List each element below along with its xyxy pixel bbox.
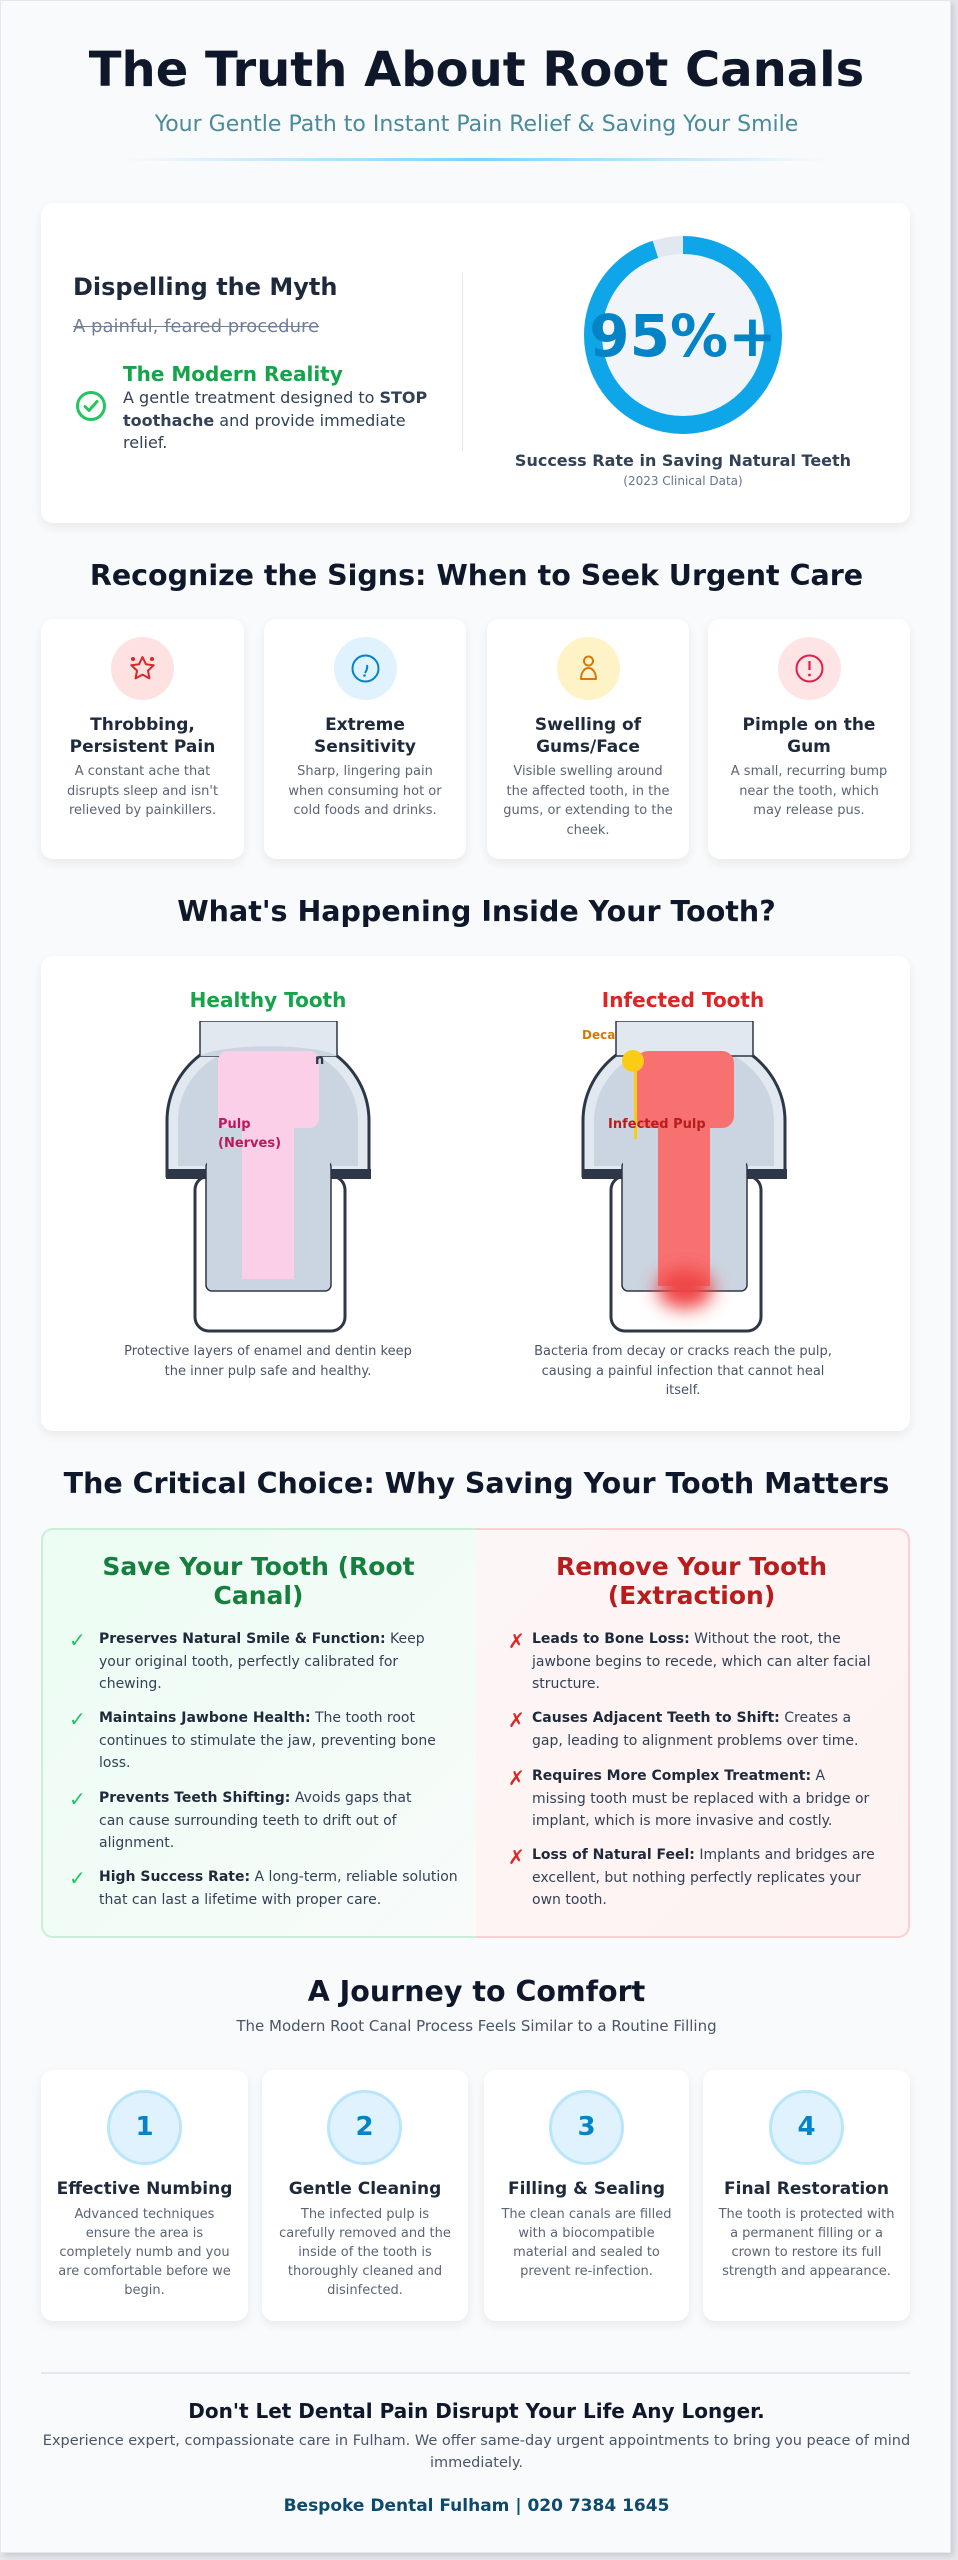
subtitle: Your Gentle Path to Instant Pain Relief & Saving Your Smile — [155, 112, 798, 137]
heading: inside your tooth: What's Happening Inside Your Tooth? — [177, 895, 776, 928]
caption: infected: Bacteria from decay or cracks reach the pulp, causing a painful infection that cannot heal itself. — [534, 1344, 832, 1398]
text — [503, 715, 673, 838]
text: The tooth is protected with a permanent filling or a crown to restore its full strength and appearance. — [719, 2207, 894, 2279]
list: Loss of Natural Feel: Implants and bridges are excellent, but nothing perfectly replicates your own tooth. — [532, 1847, 875, 1908]
text: The infected pulp is carefully removed and the inside of the tooth is thoroughly cleaned and disinfected. — [279, 2207, 451, 2298]
panel: tooth comparison — [41, 956, 910, 1431]
text: Final Restoration — [724, 2179, 889, 2199]
icon: pain star — [111, 637, 174, 700]
panel: step 4 — [703, 2070, 910, 2321]
reality text: The Modern Reality — [123, 362, 343, 386]
icon: number 1 — [107, 2090, 182, 2165]
diagram: healthy tooth — [166, 1021, 371, 1332]
heading: recognize the signs: Recognize the Signs: When to Seek Urgent Care — [90, 559, 863, 592]
myth text: A painful, feared procedure — [73, 316, 319, 337]
icon: alert — [778, 637, 841, 700]
heading: journey to comfort: A Journey to Comfort — [308, 1975, 645, 2008]
panel: step 1 — [41, 2070, 248, 2321]
column: remove your tooth — [476, 1528, 910, 1938]
panel: save vs remove — [41, 1528, 910, 1938]
list: ✓ — [69, 1787, 86, 1811]
list: Requires More Complex Treatment: A missing tooth must be replaced with a bridge or implant, which is more invasive and costly. — [532, 1768, 869, 1829]
list: ✗ — [508, 1708, 525, 1732]
diagram: infected tooth: Decay — [582, 1028, 623, 1042]
text: Visible swelling around the affected tooth, in the gums, or extending to the cheek. — [503, 764, 673, 838]
panel: step 3 — [484, 2070, 689, 2321]
footer: call to action: Experience expert, compassionate care in Fulham. We offer same-day urgent appointments to bring you peace of mind immediately. — [43, 2433, 910, 2471]
text: Extreme Sensitivity — [314, 715, 416, 757]
list: Maintains Jawbone Health: The tooth root continues to stimulate the jaw, preventing bone loss. — [99, 1710, 436, 1771]
panel: sign 3 — [487, 619, 689, 859]
heading: critical choice: The Critical Choice: Why Saving Your Tooth Matters — [64, 1467, 889, 1500]
text: Swelling of Gums/Face — [535, 715, 641, 757]
caption: success rate: (2023 Clinical Data) — [623, 474, 743, 488]
healthy tooth title: Healthy Tooth — [190, 988, 346, 1012]
text: Pimple on the Gum — [743, 715, 875, 757]
text: Effective Numbing — [57, 2179, 232, 2199]
list: High Success Rate: A long-term, reliable solution that can last a lifetime with proper care. — [99, 1869, 458, 1908]
panel: myth vs reality — [41, 203, 910, 523]
diagram: healthy tooth: Pulp — [218, 1117, 251, 1132]
footer: call to action: Bespoke Dental Fulham | 020 7384 1645 — [284, 2496, 669, 2516]
icon: number 2 — [327, 2090, 402, 2165]
list: Prevents Teeth Shifting: Avoids gaps that can cause surrounding teeth to drift out of alignment. — [99, 1790, 412, 1851]
text: Filling & Sealing — [508, 2179, 665, 2199]
diagram: infected tooth: Infected Pulp — [608, 1117, 706, 1132]
panel: sign 1 — [41, 619, 244, 859]
footer: call to action — [43, 2399, 910, 2516]
text: Throbbing, Persistent Pain — [70, 715, 215, 757]
text: Sharp, lingering pain when consuming hot or cold foods and drinks. — [288, 764, 442, 818]
chart: success ring: 95%+ — [589, 302, 777, 370]
caption: success rate: Success Rate in Saving Natural Teeth — [515, 451, 851, 470]
chart: success ring — [584, 236, 782, 434]
diagram: healthy tooth: (Nerves) — [218, 1136, 281, 1151]
list: Leads to Bone Loss: Without the root, the jawbone begins to recede, which can alter facial structure. — [532, 1631, 871, 1692]
text: A small, recurring bump near the tooth, which may release pus. — [731, 764, 887, 818]
infected tooth title: Infected Tooth — [602, 988, 764, 1012]
caption: success rate — [515, 451, 851, 488]
footer: call to action: Don't Let Dental Pain Disrupt Your Life Any Longer. — [188, 2399, 765, 2423]
icon: swelling — [557, 637, 620, 700]
list: ✗ — [508, 1629, 525, 1653]
text — [67, 715, 218, 818]
text — [730, 715, 887, 818]
icon: number 4 — [769, 2090, 844, 2165]
icon: number 4: 4 — [797, 2112, 816, 2142]
list: ✗ — [508, 1766, 525, 1790]
icon: number 3: 3 — [577, 2112, 596, 2142]
text: A constant ache that disrupts sleep and isn't relieved by painkillers. — [67, 764, 218, 818]
list — [508, 1629, 875, 1908]
column: save your tooth — [41, 1528, 476, 1938]
list — [69, 1628, 458, 1908]
icon: number 1: 1 — [135, 2112, 154, 2142]
diagram: infected tooth — [582, 1021, 787, 1332]
icon: check — [76, 391, 106, 421]
heading: Remove Your Tooth (Extraction) — [556, 1552, 827, 1610]
panel: sign 2 — [264, 619, 466, 859]
heading: dispelling the myth: Dispelling the Myth — [73, 273, 337, 301]
list: ✓ — [69, 1628, 86, 1652]
subheading: The Modern Root Canal Process Feels Similar to a Routine Filling — [236, 2017, 717, 2035]
text: Gentle Cleaning — [289, 2179, 441, 2199]
title: The Truth About Root Canals — [89, 42, 864, 98]
list: ✗ — [508, 1845, 525, 1869]
panel: step 2 — [262, 2070, 468, 2321]
list: ✓ — [69, 1707, 86, 1731]
list: Causes Adjacent Teeth to Shift: Creates a gap, leading to alignment problems over time. — [532, 1710, 858, 1748]
text: The clean canals are filled with a biocompatible material and sealed to prevent re-infection. — [501, 2207, 672, 2279]
text: Advanced techniques ensure the area is completely numb and you are comfortable before we begin. — [58, 2207, 231, 2298]
caption: healthy: Protective layers of enamel and dentin keep the inner pulp safe and healthy. — [124, 1344, 412, 1378]
list: Preserves Natural Smile & Function: Keep your original tooth, perfectly calibrated for chewing. — [99, 1631, 425, 1692]
panel: sign 4 — [708, 619, 910, 859]
diagram: healthy tooth: n — [315, 1053, 324, 1068]
icon: number 2: 2 — [355, 2112, 374, 2142]
list: ✓ — [69, 1866, 86, 1890]
reality text: A gentle treatment designed to STOP toothache and provide immediate relief. — [123, 388, 427, 452]
icon: sensitivity — [334, 637, 397, 700]
text — [288, 715, 442, 818]
icon: number 3 — [549, 2090, 624, 2165]
heading: Save Your Tooth (Root Canal) — [102, 1552, 415, 1610]
